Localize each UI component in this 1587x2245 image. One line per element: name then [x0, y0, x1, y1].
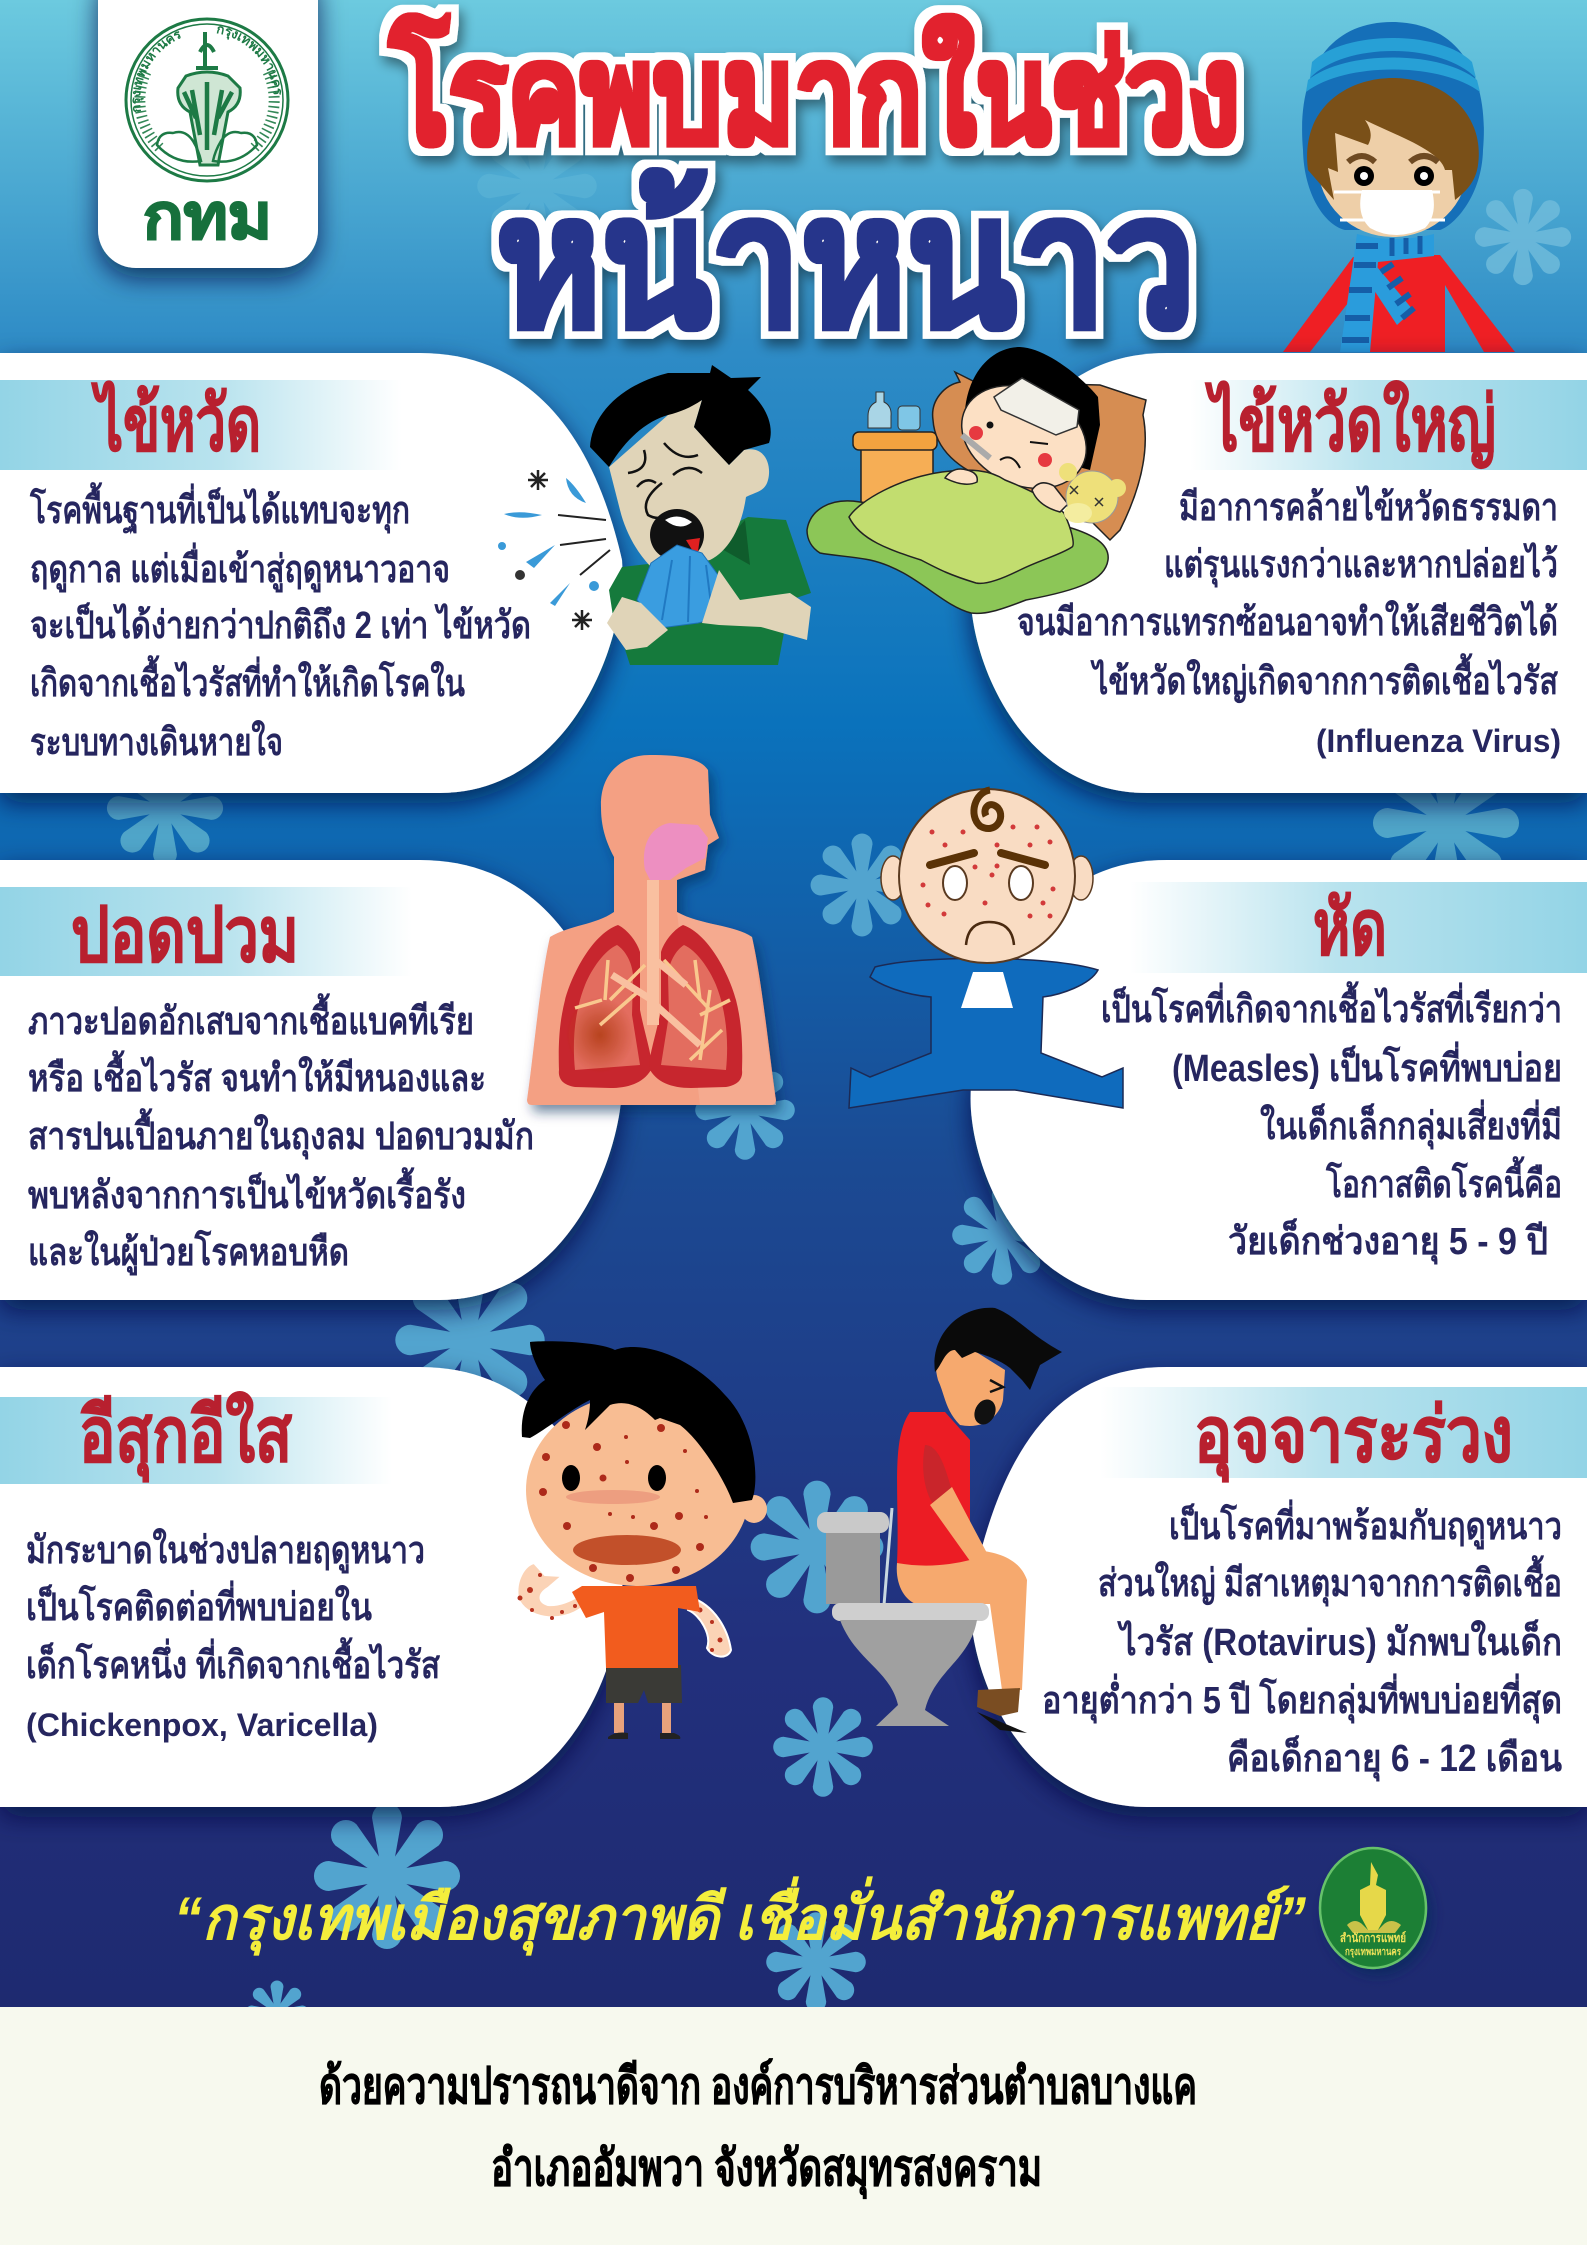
- body text: common cold: โรคพื้นฐานที่เป็นได้แทบจะทุก: [29, 482, 410, 535]
- body text: chickenpox: (Chickenpox, Varicella): [26, 1707, 378, 1743]
- icon: sick child in bed: [807, 347, 1146, 613]
- closing message: [319, 2058, 1197, 2199]
- sneeze droplets: [498, 470, 610, 630]
- icon: masked child: [1283, 22, 1515, 352]
- heading: influenza: ไข้หวัดใหญ่: [1205, 380, 1496, 469]
- medical department seal: กรุงเทพมหานคร: [1345, 1947, 1401, 1958]
- body text: chickenpox: [26, 1528, 441, 1743]
- closing line 1: ด้วยความปรารถนาดีจาก องค์การบริหารส่วนตำบลบางแค: [319, 2058, 1197, 2114]
- panel: pneumonia: [0, 860, 622, 1300]
- body text: pneumonia: [28, 993, 534, 1276]
- body text: pneumonia: ภาวะปอดอักเสบจากเชื้อแบคทีเรีย: [28, 993, 474, 1043]
- heading: measles: หัด: [1313, 886, 1387, 971]
- left lung: [559, 925, 652, 1088]
- body text: chickenpox: มักระบาดในช่วงปลายฤดูหนาว: [26, 1528, 425, 1574]
- body text: common cold: เกิดจากเชื้อไวรัสที่ทำให้เกิดโรคใน: [30, 655, 465, 705]
- title: [388, 14, 1240, 365]
- body text: influenza: [1017, 485, 1561, 759]
- body text: chickenpox: เป็นโรคติดต่อที่พบบ่อยใน: [26, 1580, 372, 1629]
- body text: pneumonia: พบหลังจากการเป็นไข้หวัดเรื้อรัง: [28, 1167, 466, 1217]
- icon: chickenpox boy: [517, 1341, 767, 1739]
- body text: pneumonia: หรือ เชื้อไวรัส จนทำให้มีหนองและ: [28, 1050, 486, 1100]
- logo card: [78, 0, 338, 296]
- panel: common cold: [0, 353, 622, 793]
- icon: lungs diagram: [527, 755, 776, 1105]
- heading: diarrhea: อุจจาระร่วง: [1194, 1393, 1513, 1483]
- body text: diarrhea: [1042, 1499, 1562, 1782]
- body text: measles: วัยเด็กช่วงอายุ 5 - 9 ปี: [1228, 1218, 1548, 1265]
- body text: chickenpox: เด็กโรคหนึ่ง ที่เกิดจากเชื้อไวรัส: [26, 1637, 441, 1687]
- snowflakes: [107, 126, 1571, 2044]
- teddy bear: [1059, 463, 1126, 523]
- panel: chickenpox: [0, 1367, 622, 1807]
- medical department seal: [1320, 1848, 1426, 1968]
- seal caption: สำนักการแพทย์: [1340, 1931, 1406, 1945]
- body text: pneumonia: สารปนเปื้อนภายในถุงลม ปอดบวมมัก: [28, 1108, 534, 1160]
- body text: measles: [1101, 981, 1562, 1265]
- arms: [517, 1563, 583, 1617]
- BMA seal: กรุงเทพมหานคร: [216, 26, 282, 95]
- title line 1: โรคพบมากในช่วง: [388, 14, 1240, 173]
- body text: common cold: ฤดูกาล แต่เมื่อเข้าสู่ฤดูหนาวอาจ: [30, 542, 450, 593]
- panel: diarrhea: [971, 1367, 1587, 1807]
- body text: pneumonia: และในผู้ป่วยโรคหอบหืด: [28, 1229, 349, 1276]
- body text: common cold: จะเป็นได้ง่ายกว่าปกติถึง 2 เท่า ไข้หวัด: [30, 602, 531, 647]
- icon: measles baby: [849, 789, 1123, 1108]
- slogan: “กรุงเทพเมืองสุขภาพดี เชื่อมั่นสำนักการแพทย์”: [174, 1876, 1306, 1956]
- icon: boy on toilet: [817, 1308, 1062, 1733]
- body text: common cold: [29, 482, 531, 764]
- closing line 2: อำเภออัมพวา จังหวัดสมุทรสงคราม: [491, 2140, 1042, 2199]
- bottom band: white message area: [0, 2007, 1587, 2245]
- panel: measles: [971, 860, 1587, 1300]
- heading: common cold: ไข้หวัด: [91, 380, 261, 467]
- title line 2: หน้าหนาว: [496, 159, 1196, 365]
- icon: sneezing man: [498, 365, 811, 665]
- BMA seal: กรุงเทพมหานคร: [132, 30, 181, 112]
- body text: influenza: (Influenza Virus): [1316, 723, 1561, 759]
- panel: influenza: [971, 353, 1587, 793]
- กทม label: กทม: [143, 183, 272, 252]
- right lung: [649, 925, 742, 1088]
- body text: common cold: ระบบทางเดินหายใจ: [30, 720, 283, 764]
- BMA seal: [124, 18, 290, 182]
- heading: chickenpox: อีสุกอีใส: [79, 1391, 292, 1483]
- heading: pneumonia: ปอดปวม: [71, 893, 299, 978]
